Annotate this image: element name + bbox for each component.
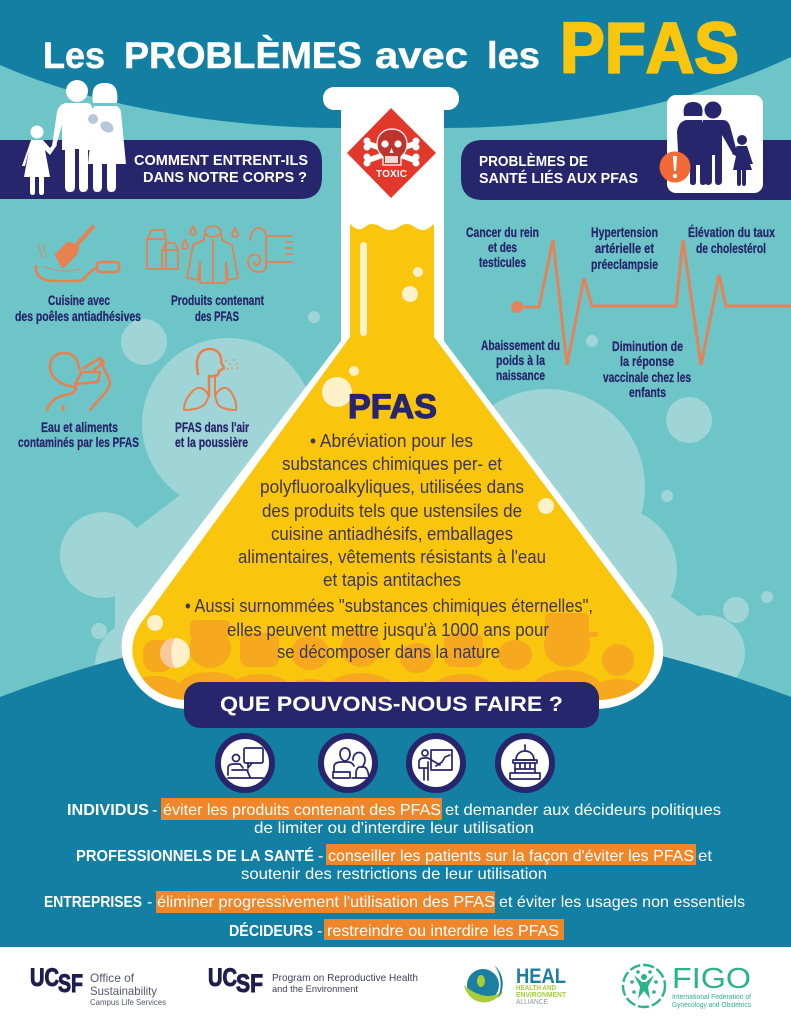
icon: white family: [22, 80, 126, 195]
left banner: how they enter: [0, 140, 322, 199]
flask body text: • Aussi surnommées "substances chimiques éternelles",: [185, 596, 593, 616]
action: health professionals: -: [318, 848, 323, 865]
health labels: Hypertension: [591, 225, 658, 240]
health labels: préeclampsie: [591, 257, 658, 272]
logo: UCSF Office of Sustainability: SF: [58, 970, 83, 998]
action: individuals: éviter les produits contenant des PFAS: [163, 802, 441, 819]
icon: lungs and breathing: [184, 349, 239, 410]
logo: UCSF Office of Sustainability: [30, 964, 166, 1007]
top band: [0, 0, 791, 128]
action: health professionals: PROFESSIONNELS DE LA SANTÉ: [76, 846, 314, 865]
health labels: la réponse: [620, 354, 674, 369]
health labels: Abaissement du: [481, 338, 560, 353]
action: companies: ENTREPRISES: [44, 894, 142, 911]
icon: health professional: [321, 736, 375, 790]
health labels: Cancer du rein: [466, 225, 539, 240]
title: PROBLÈMES: [124, 35, 362, 76]
left labels: Cuisine avec: [48, 293, 110, 308]
logo: HEAL: ALLIANCE: [516, 999, 548, 1006]
heartbeat chart: [511, 240, 791, 365]
left labels: des PFAS: [195, 309, 239, 324]
left labels: contaminés par les PFAS: [18, 435, 139, 450]
silhouettes of people in the flask: [142, 613, 640, 700]
icon: pan and spatula: [36, 227, 119, 281]
action: individuals: INDIVIDUS: [67, 802, 149, 819]
logo: UCSF Program on Reproductive Health: Program on Reproductive Health: [272, 972, 418, 984]
left banner: how they enter: DANS NOTRE CORPS ?: [143, 169, 307, 186]
action: companies: éliminer progressivement l'utilisation des PFAS: [157, 894, 495, 911]
flask: [122, 87, 663, 718]
action banner: QUE POUVONS-NOUS FAIRE ?: [220, 692, 563, 716]
left labels: Eau et aliments: [41, 420, 118, 435]
flask body text: cuisine antiadhésifs, emballages: [271, 524, 513, 544]
logo: UCSF Office of Sustainability: Sustainability: [90, 984, 157, 998]
logo: UCSF Office of Sustainability: Office of: [90, 971, 135, 985]
action: policy makers: DÉCIDEURS: [229, 921, 313, 940]
health labels: [466, 225, 775, 400]
right banner: health problems: [461, 140, 791, 200]
flask body text: [185, 431, 593, 662]
action: policy makers: -: [317, 923, 322, 940]
health labels: artérielle et: [595, 241, 654, 256]
health labels: vaccinale chez les: [603, 370, 691, 385]
logo: UCSF Office of Sustainability: UC: [30, 964, 59, 992]
flask body text: se décomposer dans la nature: [277, 642, 500, 662]
health labels: poids à la: [496, 353, 545, 368]
logo: UCSF Office of Sustainability: Campus Life Services: [90, 997, 166, 1007]
action: health professionals: conseiller les patients sur la façon d'éviter les PFAS: [328, 848, 694, 865]
logo: HEAL: [466, 965, 567, 1006]
action: individuals: [67, 798, 721, 837]
logo: FIGO: Gynecology and Obstetrics: [672, 1000, 751, 1009]
left banner: how they enter: COMMENT ENTRENT-ILS: [134, 152, 308, 169]
action: health professionals: [76, 844, 713, 883]
flask body text: substances chimiques per- et: [282, 454, 502, 474]
icon: toxic diamond: [347, 108, 436, 198]
health labels: de cholestérol: [696, 241, 766, 256]
bottom band: [0, 622, 791, 947]
left labels: [15, 293, 264, 450]
right banner: health problems: SANTÉ LIÉS AUX PFAS: [479, 170, 638, 187]
action: policy makers: [229, 919, 564, 940]
logo: UCSF Program on Reproductive Health: SF: [236, 970, 263, 998]
health labels: enfants: [629, 385, 666, 400]
logo: FIGO: International Federation of: [672, 992, 752, 1001]
logo: FIGO: [623, 963, 752, 1009]
background bubbles: [60, 311, 773, 710]
logo: UCSF Program on Reproductive Health: and the Environment: [272, 984, 358, 995]
icon: capitol: [498, 736, 552, 790]
action: health professionals: et: [698, 848, 713, 865]
action: individuals: et demander aux décideurs politiques: [445, 802, 721, 819]
icon: individual at laptop: [218, 736, 272, 790]
title: avec: [375, 35, 468, 76]
flask body text: des produits tels que ustensiles de: [262, 501, 522, 521]
icon: teacher with chart: [409, 736, 463, 790]
title: les: [487, 35, 540, 76]
action: individuals: -: [152, 802, 157, 819]
health labels: testicules: [479, 255, 526, 270]
left labels: Produits contenant: [171, 293, 264, 308]
PFAS heading: PFAS: [348, 388, 437, 426]
action banner: [184, 682, 599, 728]
flask body text: • Abréviation pour les: [310, 431, 473, 451]
logo: UCSF Program on Reproductive Health: UC: [208, 964, 237, 992]
flask body text: et tapis antitaches: [323, 570, 461, 590]
title: [43, 10, 739, 88]
action: policy makers: restreindre ou interdire les PFAS: [327, 923, 559, 940]
icon: toxic diamond: TOXIC: [376, 169, 407, 180]
action: health professionals: soutenir des restrictions de leur utilisation: [241, 866, 547, 883]
right banner: health problems: PROBLÈMES DE: [479, 153, 588, 170]
title: Les: [43, 35, 105, 76]
logo: HEAL: HEAL: [516, 965, 566, 988]
health labels: Diminution de: [612, 339, 683, 354]
health labels: et des: [488, 240, 517, 255]
flask body text: elles peuvent mettre jusqu'à 1000 ans pour: [227, 620, 549, 640]
icon: drinking person: [47, 353, 110, 410]
flask body text: polyfluoroalkyliques, utilisées dans: [260, 477, 524, 497]
title: PFAS: [560, 10, 739, 88]
left labels: et la poussière: [175, 435, 248, 450]
logo: HEAL: ENVIRONMENT: [516, 992, 567, 999]
left labels: des poêles antiadhésives: [15, 309, 141, 324]
action: companies: [44, 891, 745, 913]
action: individuals: de limiter ou d'interdire leur utilisation: [254, 820, 534, 837]
footer background: [0, 947, 791, 1024]
logo: FIGO: FIGO: [672, 963, 751, 995]
health labels: naissance: [496, 368, 545, 383]
icon: family in white square with alert: [660, 95, 763, 193]
logo: UCSF Program on Reproductive Health: [208, 964, 418, 998]
left labels: PFAS dans l'air: [175, 420, 250, 435]
action: companies: et éviter les usages non essentiels: [499, 894, 745, 911]
flask body text: alimentaires, vêtements résistants à l'eau: [238, 547, 546, 567]
bubbles in the flask: [147, 242, 554, 668]
icon: PFAS products: [147, 226, 292, 283]
action: companies: -: [147, 894, 152, 911]
logo: HEAL: HEALTH AND: [516, 985, 556, 992]
